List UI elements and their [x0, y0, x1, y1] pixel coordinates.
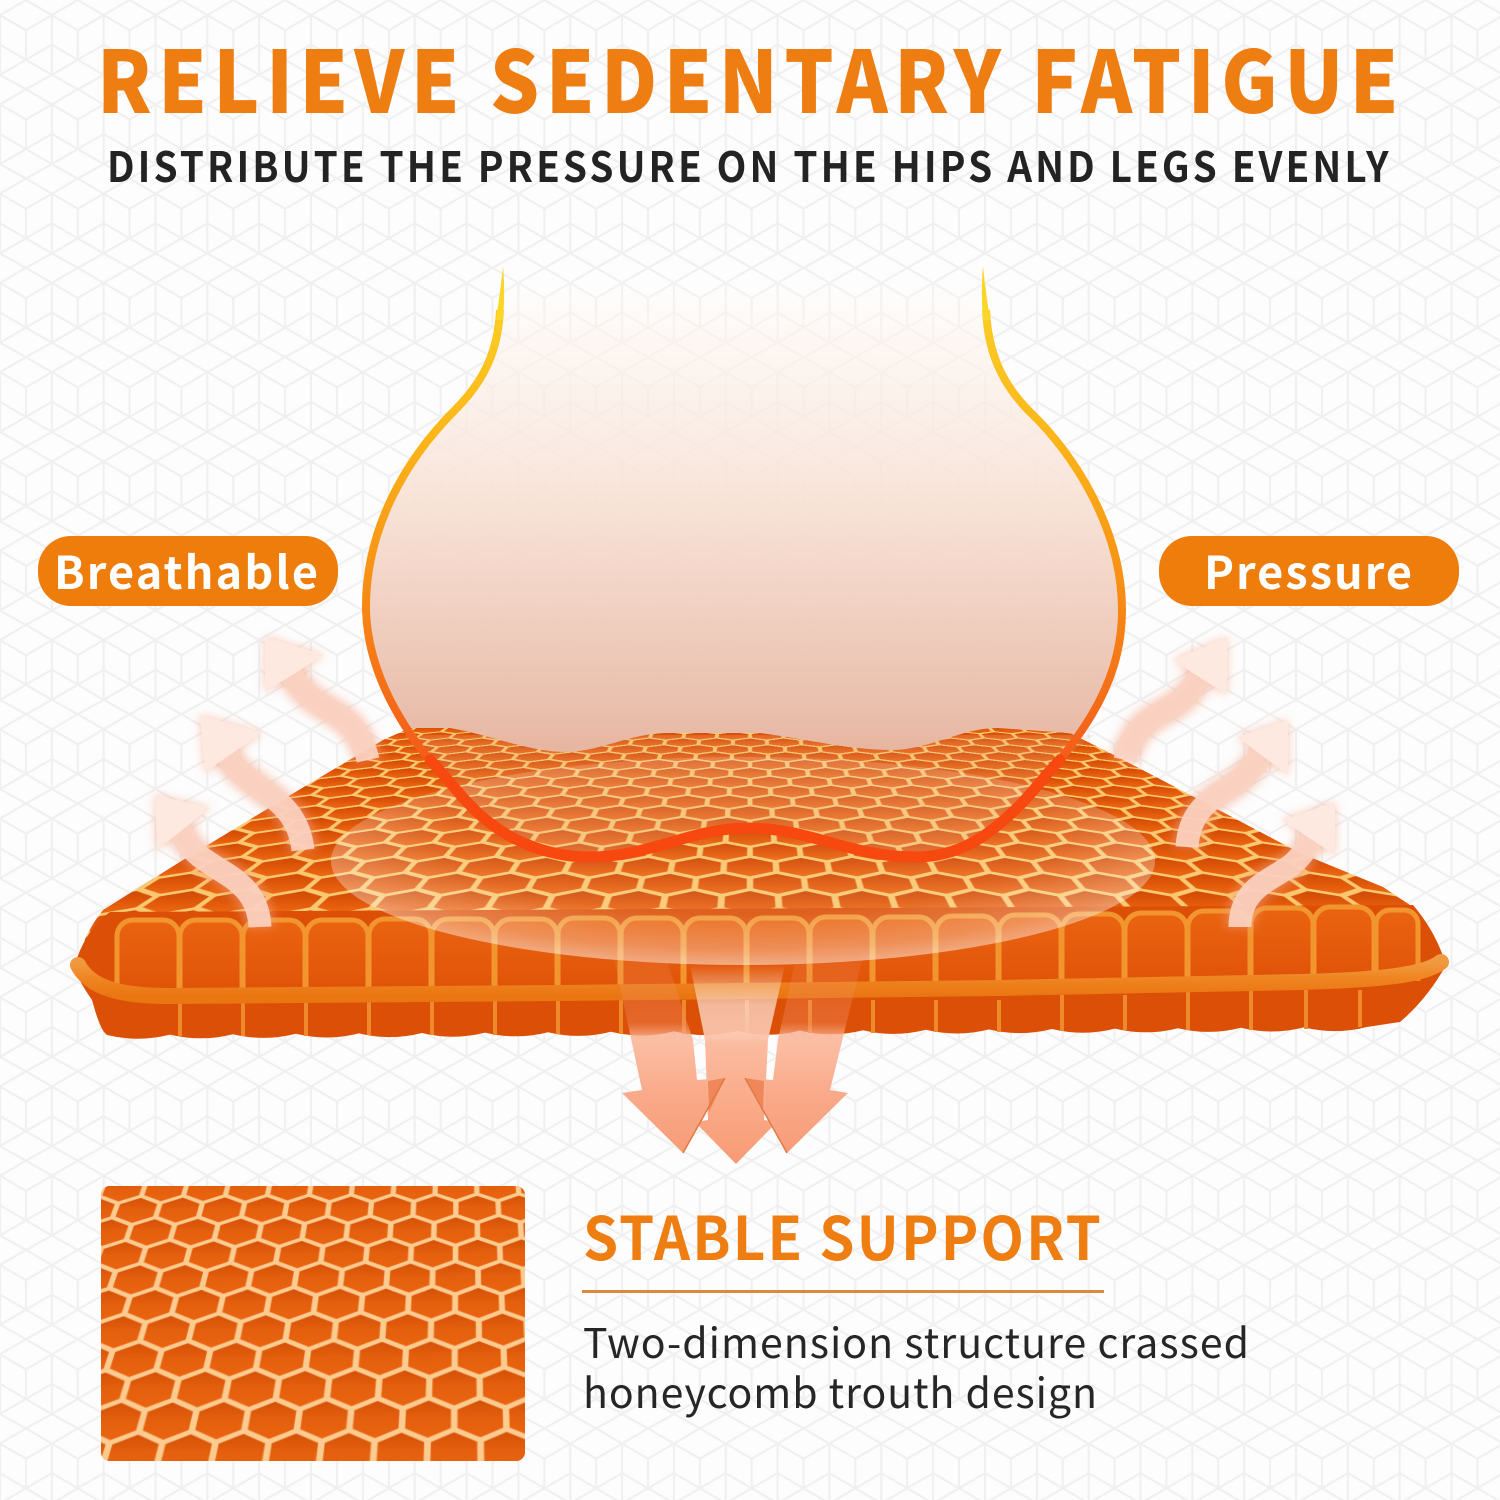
- description: [583, 1310, 1249, 1420]
- body outline: [366, 310, 1122, 857]
- wing overlaps on centre arrow: [708, 1078, 764, 1112]
- arrow: right lower: [1240, 802, 1335, 927]
- description: honeycomb trouth design: [583, 1360, 1097, 1420]
- arrow head edge lines: [683, 1078, 787, 1153]
- description: Two-dimension structure crassed: [583, 1310, 1249, 1370]
- rope seam around the cushion: [78, 962, 1441, 996]
- arrow: left middle: [200, 715, 303, 850]
- pressure ellipse: [331, 757, 1155, 965]
- thicker bottom outline: [430, 760, 1060, 857]
- lower cell seams: [180, 990, 1360, 1036]
- title: RELIEVE SEDENTARY FATIGUE: [97, 13, 1398, 138]
- body silhouette fill: [366, 268, 1122, 857]
- subtitle: DISTRIBUTE THE PRESSURE ON THE HIPS AND LEGS EVENLY: [107, 133, 1389, 194]
- left arrow: [610, 940, 725, 1153]
- cushion top surface: honeycomb in perspective: [84, 728, 1410, 941]
- badge: breathable: Breathable: [54, 537, 318, 602]
- cushion front wall: [70, 904, 1449, 1039]
- badge: pressure: [1159, 536, 1459, 606]
- tint over cushion inside the body: [405, 735, 1095, 857]
- upper cells: [114, 904, 1420, 988]
- heading: stable support: STABLE SUPPORT: [583, 1190, 1101, 1278]
- honeycomb detail swatch: [101, 1186, 525, 1461]
- arrow: right upper: [1125, 637, 1227, 760]
- arrow: right middle: [1187, 720, 1288, 847]
- right arrow: [745, 940, 867, 1153]
- arrow: left lower: [155, 795, 260, 927]
- badge: pressure: Pressure: [1204, 537, 1412, 602]
- outline tips: [496, 266, 990, 320]
- arrow: left upper: [265, 637, 368, 760]
- wall body: [74, 905, 1446, 1039]
- centre arrow: [690, 965, 785, 1164]
